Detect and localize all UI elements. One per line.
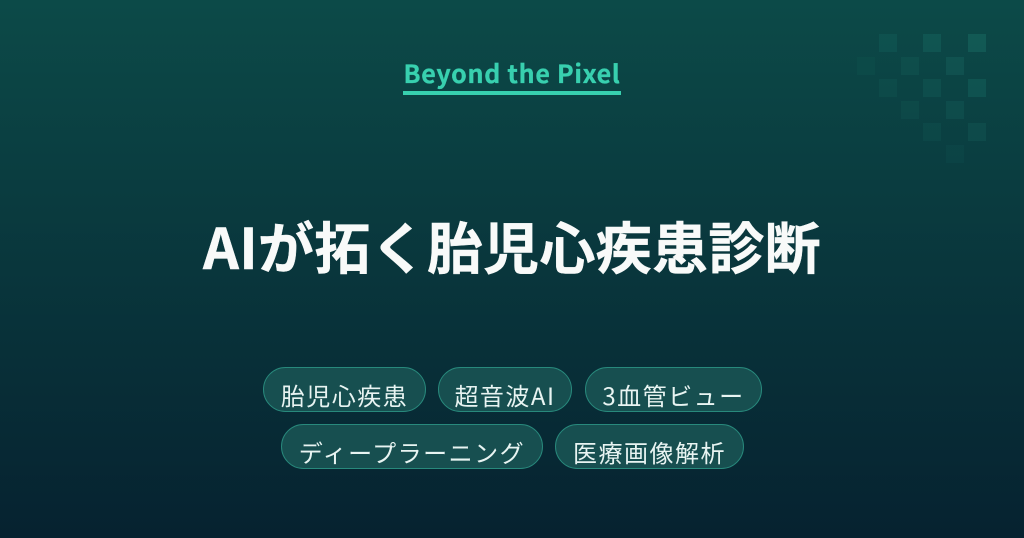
tag: ultrasound AI — [438, 367, 572, 412]
title: AIが拓く胎児心疾患診断 — [203, 205, 821, 286]
tag: ultrasound AI: 超音波AI — [454, 377, 556, 412]
tag: deep learning — [281, 424, 543, 469]
tag: three vessel view: 3血管ビュー — [602, 377, 745, 412]
tag: medical image analysis: 医療画像解析 — [573, 434, 726, 469]
decorative pixel grid icon — [879, 34, 986, 141]
eyebrow heading with underline: Beyond the Pixel — [403, 55, 620, 91]
tag: medical image analysis — [555, 424, 744, 469]
tag: deep learning: ディープラーニング — [299, 434, 525, 469]
tag: three vessel view — [585, 367, 762, 412]
tag: fetal heart disease: 胎児心疾患 — [281, 377, 408, 412]
tag: fetal heart disease — [263, 367, 426, 412]
